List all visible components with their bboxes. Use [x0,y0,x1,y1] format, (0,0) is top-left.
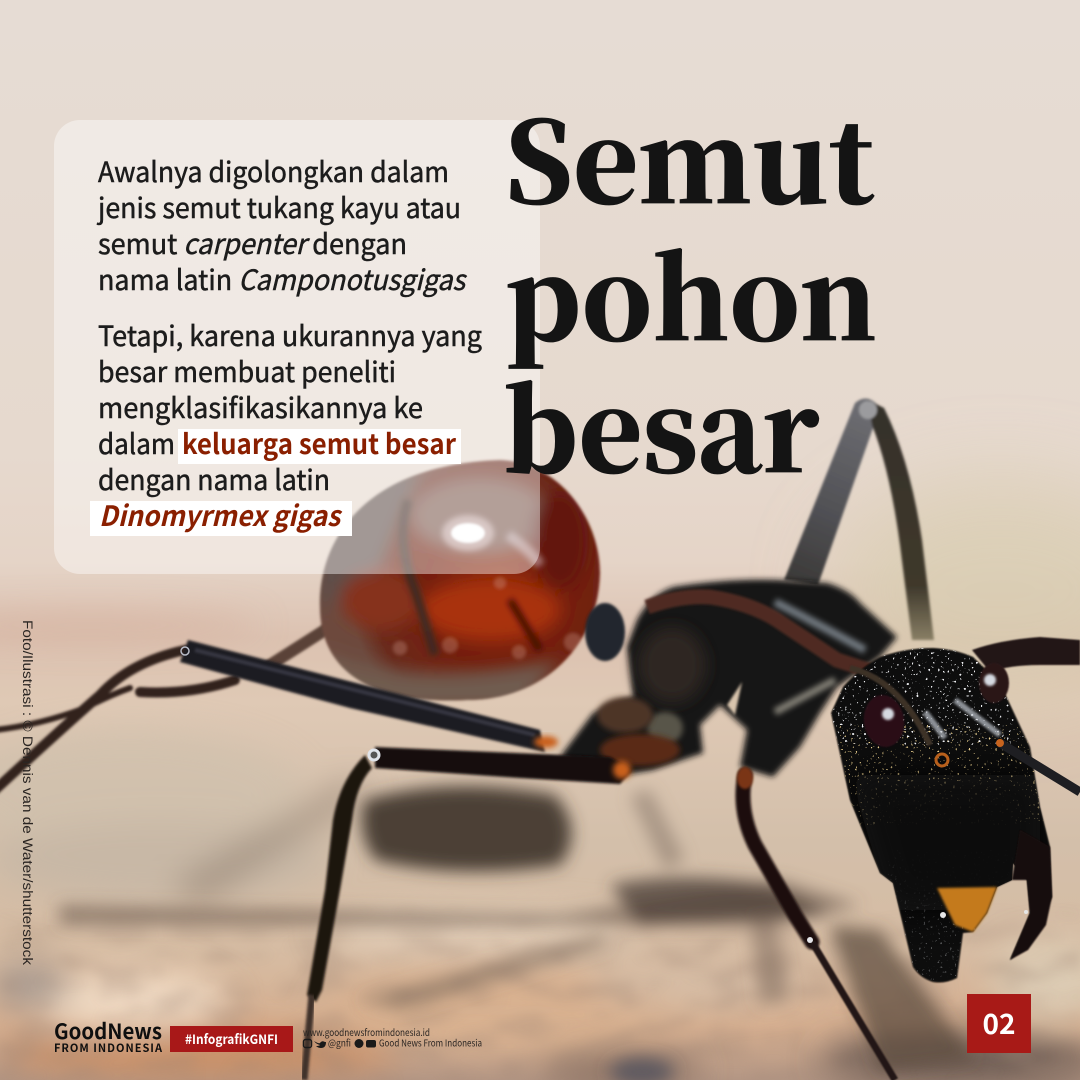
ant abdomen [318,458,602,702]
translucent text panel [54,120,540,574]
social media links [303,1025,482,1050]
ant illustration [0,399,1080,1080]
title [503,75,877,504]
text block: first paragraph: semut carpenter dengan [98,223,407,263]
hashtag badge: #InfografikGNFI [185,1029,278,1048]
highlight: Dinomyrmex gigas: Dinomyrmex gigas [99,495,343,535]
ant antenna [784,399,934,640]
ant petiole node [585,603,625,661]
text block: second paragraph: mengklasifikasikannya ke [98,387,423,427]
title: Semut [505,75,875,235]
logo: GoodNews From Indonesia: GoodNews [54,1016,162,1046]
icon: facebook [354,1039,364,1048]
ant thorax [560,580,897,777]
background photo: blurred floor [0,440,1080,1080]
abdomen highlight [442,515,494,551]
text block: first paragraph: nama latin Camponotusgigas [98,259,468,299]
text block: second paragraph: dalam [98,423,175,463]
text block: second paragraph: dengan nama latin [98,459,330,499]
hashtag badge [170,1026,293,1052]
text block: second paragraph [90,315,482,536]
ant front legs [180,637,1080,1080]
logo: GoodNews From Indonesia: FROM INDONESIA [54,1040,163,1056]
highlight: keluarga semut besar: keluarga semut besar [182,423,457,463]
ant head [830,645,1080,982]
icon: twitter [314,1041,326,1048]
social media links: www.goodnewsfromindonesia.id [303,1025,430,1039]
social media links: Good News From Indonesia [379,1036,482,1050]
social media links: @gnfi [328,1036,351,1050]
icon: instagram [304,1040,312,1048]
text block: first paragraph [96,151,468,299]
page number badge: 02 [982,1003,1016,1043]
icon: youtube [366,1040,376,1048]
photo credit: Foto/Ilustrasi : © Dennis van de Water/shutterstock [20,620,35,965]
text block: first paragraph: jenis semut tukang kayu atau [96,187,461,227]
floor texture [4,928,1080,1070]
ant back legs [0,630,325,790]
text block: second paragraph: besar membuat peneliti [98,351,396,391]
title: besar [503,344,819,504]
page number badge [967,994,1031,1053]
title: pohon [505,212,877,372]
text block: first paragraph: Awalnya digolongkan dalam [98,151,449,191]
text block: second paragraph: Tetapi, karena ukurannya yang [98,315,482,355]
